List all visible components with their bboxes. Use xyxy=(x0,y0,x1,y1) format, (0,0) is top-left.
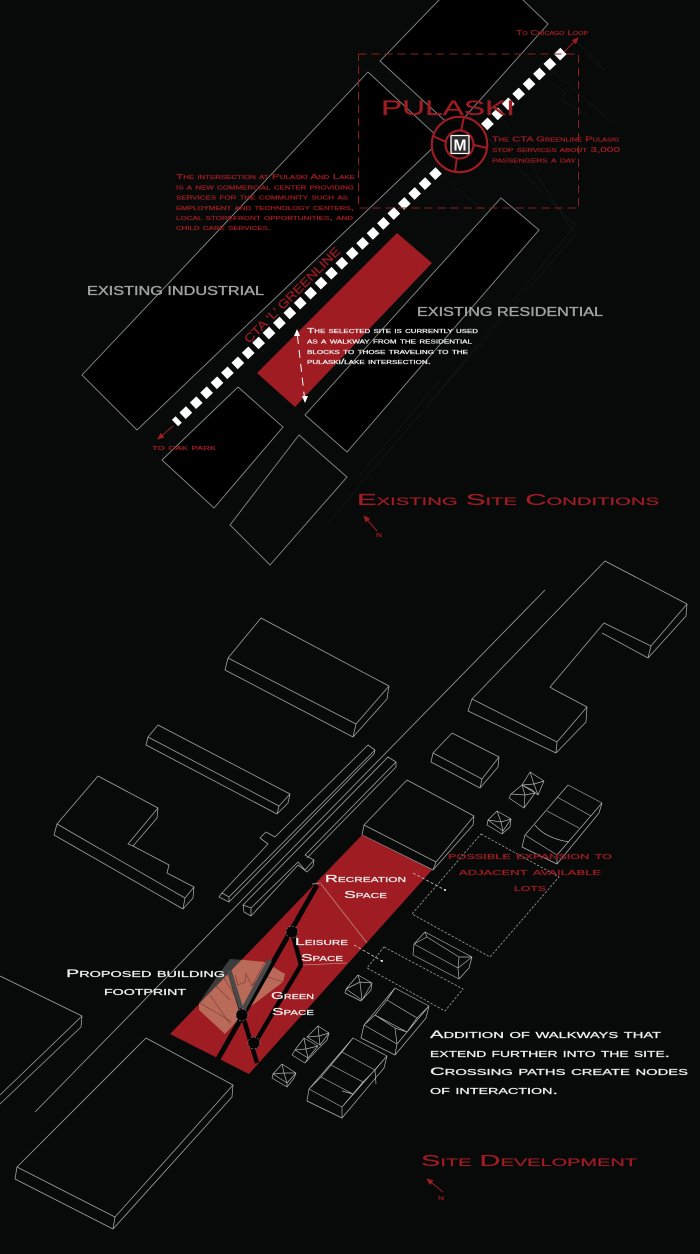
panel: site development axonometric xyxy=(0,561,688,1229)
label: to Chicago Loop xyxy=(516,28,589,52)
label: possible expansion: lots xyxy=(514,882,547,894)
text: intersection description xyxy=(176,172,356,232)
block: existing industrial xyxy=(82,72,441,430)
building: long bar xyxy=(146,725,290,814)
text: station ridership: The CTA Greenline Pulaski xyxy=(492,134,619,144)
text: intersection description: is a new commercial center providing xyxy=(176,182,354,192)
label: to Oak Park xyxy=(152,426,217,452)
block: south-west corner xyxy=(162,387,283,508)
label: possible expansion: possible expansion to xyxy=(448,850,613,862)
text: walkway description: of interaction. xyxy=(430,1085,558,1097)
houses: north-east cluster xyxy=(487,772,602,864)
label: proposed building footprint xyxy=(66,968,225,998)
text: selected site description: as a walkway from the residential xyxy=(307,336,472,346)
text: selected site description: The selected site is currently used xyxy=(307,326,479,335)
label: leisure space: Leisure xyxy=(295,936,349,948)
building: block above site xyxy=(362,780,474,870)
station marker: M xyxy=(454,138,466,154)
text: intersection description: local storefront opportunities, and xyxy=(176,213,354,222)
label: to Oak Park: to oak park xyxy=(152,443,217,452)
label: leisure space xyxy=(295,936,349,964)
label: proposed building footprint: footprint xyxy=(104,986,186,998)
leader: leisure to small lot xyxy=(354,945,383,962)
street edge line xyxy=(35,590,545,1112)
text: walkway description: extend further into the site. xyxy=(430,1048,670,1060)
building: north-west block xyxy=(225,618,389,737)
text: intersection description: employment and technology centers, xyxy=(176,203,354,212)
label: CTA L Greenline: CTA ‘L’ GREENLINE xyxy=(241,244,343,346)
zone divider lines xyxy=(303,884,367,965)
icon: north arrow xyxy=(364,516,382,539)
heading: existing site conditions: Existing Site Conditions xyxy=(357,492,659,509)
houses: row below site xyxy=(272,932,472,1118)
label: leisure space: Space xyxy=(301,952,344,964)
building: small block xyxy=(431,733,499,788)
leader: recreation to expansion lot xyxy=(413,873,446,891)
building: west edge block xyxy=(0,976,82,1104)
expansion lot: large xyxy=(412,834,559,957)
selected site xyxy=(257,233,432,407)
panel: existing site conditions map xyxy=(82,0,659,565)
proposed building footprint outside site xyxy=(199,959,285,1034)
CTA green line track xyxy=(175,51,564,423)
text: intersection description: child care services. xyxy=(176,223,271,232)
text: selected site description xyxy=(307,326,479,366)
text: station ridership: passengers a day xyxy=(492,156,577,164)
label: recreation space xyxy=(325,873,406,901)
text: intersection description: The intersection at Pulaski And Lake xyxy=(176,172,356,181)
heading: site development: Site Development xyxy=(421,1153,638,1170)
block: existing residential xyxy=(305,198,539,452)
text: intersection description: services for the community such as xyxy=(176,193,349,202)
label: green space: Space xyxy=(272,1006,315,1018)
site plan red parcel xyxy=(170,835,432,1074)
block: north of Lake Street xyxy=(380,0,548,129)
label: recreation space: Space xyxy=(344,889,388,901)
text: selected site description: pulaski/lake intersection. xyxy=(307,357,431,366)
icon: north arrow: N xyxy=(376,533,382,539)
platform: north track xyxy=(219,745,375,902)
text: walkway description xyxy=(430,1029,688,1097)
heading: Pulaski: PULASKI xyxy=(381,97,515,120)
block: south lot xyxy=(230,435,347,565)
label: proposed building footprint: Proposed building xyxy=(66,968,225,980)
building: L-shaped west block xyxy=(54,776,194,909)
text: station ridership xyxy=(492,134,620,164)
building: large L north-east block xyxy=(468,561,687,753)
arrow: walkway across site xyxy=(294,329,308,403)
icon: north arrow xyxy=(427,1179,444,1202)
walkways and nodes xyxy=(218,883,321,1063)
expansion lot: small xyxy=(367,947,463,1011)
label: existing residential: EXISTING RESIDENTIAL xyxy=(417,305,603,319)
label: green space: Green xyxy=(271,990,314,1002)
text: station ridership: stop services about 3,000 xyxy=(492,145,620,154)
label: recreation space: Recreation xyxy=(325,873,406,885)
text: walkway description: Crossing paths create nodes xyxy=(430,1066,688,1078)
label: green space xyxy=(271,990,315,1018)
building: south block xyxy=(15,1038,233,1229)
icon: north arrow: N xyxy=(438,1196,444,1202)
label: existing industrial: EXISTING INDUSTRIAL xyxy=(87,284,264,298)
text: walkway description: Addition of walkways that xyxy=(430,1029,661,1041)
proposed building footprint on site xyxy=(199,959,285,1034)
label: to Chicago Loop: To Chicago Loop xyxy=(516,28,589,37)
station marker xyxy=(432,117,487,172)
platform: south track xyxy=(243,757,396,916)
label: possible expansion xyxy=(448,850,613,894)
label: possible expansion: adjacent available xyxy=(459,866,602,878)
dashed study area box xyxy=(358,54,578,208)
text: selected site description: blocks to those traveling to the xyxy=(307,347,469,356)
